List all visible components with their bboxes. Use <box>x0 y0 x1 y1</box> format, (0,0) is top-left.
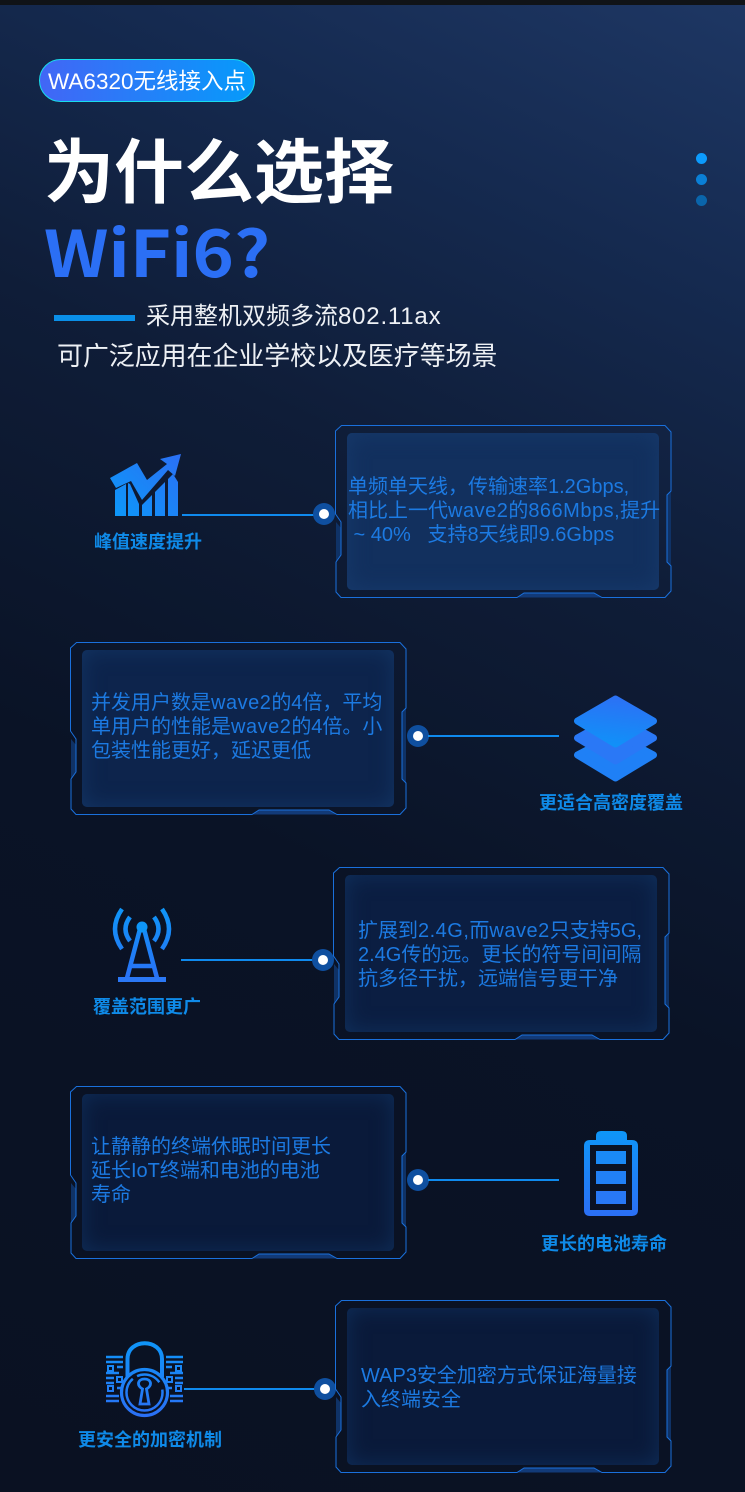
panel text <box>348 476 660 546</box>
panel body <box>347 433 659 590</box>
panel frame <box>70 1086 406 1259</box>
label: battery life: 更长的电池寿命 <box>541 1234 667 1254</box>
label: encryption: 更安全的加密机制 <box>78 1430 222 1450</box>
connector line <box>184 1388 315 1390</box>
connector dot <box>407 1169 429 1191</box>
decorative dots <box>696 153 707 206</box>
panel: speed description <box>335 425 672 598</box>
icon: padlock with data <box>106 1341 183 1418</box>
panel text: ~ 40% 支持8天线即9.6Gbps <box>354 524 614 546</box>
label: high density: 更适合高密度覆盖 <box>539 793 683 813</box>
panel text: 抗多径干扰，远端信号更干净 <box>358 968 618 990</box>
icon: stacked layers <box>574 696 657 782</box>
connector line <box>428 735 559 737</box>
connector dot <box>314 1378 336 1400</box>
connector line <box>428 1179 559 1181</box>
panel: battery description <box>70 1086 406 1259</box>
connector dot <box>407 725 429 747</box>
panel: density description <box>70 642 406 815</box>
connector dot <box>312 949 334 971</box>
panel frame <box>333 867 670 1040</box>
connector line <box>181 959 313 961</box>
panel text: 包装性能更好，延迟更低 <box>91 740 311 762</box>
accent bar <box>54 315 135 321</box>
panel frame <box>335 425 672 598</box>
panel text: 单频单天线，传输速率1.2Gbps, <box>348 476 629 498</box>
row 5: encryption <box>78 1300 672 1473</box>
top dark strip <box>0 0 745 5</box>
panel: encryption description <box>335 1300 672 1473</box>
panel body <box>82 1094 394 1251</box>
icon: signal tower <box>112 908 172 982</box>
badge: product name pill <box>39 59 255 102</box>
panel body <box>345 875 657 1032</box>
subtitle line two: 可广泛应用在企业学校以及医疗等场景 <box>57 341 497 371</box>
row 1: peak speed <box>94 425 672 598</box>
panel text: 入终端安全 <box>361 1389 461 1411</box>
panel text: 寿命 <box>91 1184 131 1206</box>
panel text: 延长IoT终端和电池的电池 <box>91 1160 320 1182</box>
label: coverage range: 覆盖范围更广 <box>93 997 201 1017</box>
label: peak speed: 峰值速度提升 <box>94 532 202 552</box>
panel text: 相比上一代wave2的866Mbps,提升 <box>348 500 660 522</box>
panel text <box>91 692 382 762</box>
row 4: battery life <box>70 1086 667 1259</box>
panel text: 单用户的性能是wave2的4倍。小 <box>91 716 382 738</box>
title: WiFi6 heading: WiFi6? <box>44 204 270 296</box>
panel text <box>358 920 642 990</box>
title: main heading: 为什么选择 <box>44 134 394 212</box>
row 2: high density coverage <box>70 642 683 815</box>
panel text: 2.4G传的远。更长的符号间间隔 <box>358 944 641 966</box>
panel frame <box>70 642 406 815</box>
panel text: 扩展到2.4G,而wave2只支持5G, <box>358 920 642 942</box>
row 3: wider coverage <box>93 867 670 1040</box>
panel text: WAP3安全加密方式保证海量接 <box>361 1365 637 1387</box>
panel text: 让静静的终端休眠时间更长 <box>91 1136 331 1158</box>
badge: product name pill: WA6320无线接入点 <box>48 69 246 94</box>
connector line <box>182 514 316 516</box>
icon: rising chart <box>110 454 181 516</box>
panel text: 并发用户数是wave2的4倍，平均 <box>91 692 382 714</box>
panel frame <box>335 1300 672 1473</box>
panel body <box>347 1308 659 1465</box>
panel: coverage description <box>333 867 670 1040</box>
panel body <box>82 650 394 807</box>
panel text <box>361 1364 637 1411</box>
icon: battery <box>584 1131 638 1216</box>
connector dot <box>313 503 335 525</box>
subtitle line one: 采用整机双频多流802.11ax <box>146 303 441 330</box>
panel text <box>91 1136 331 1206</box>
